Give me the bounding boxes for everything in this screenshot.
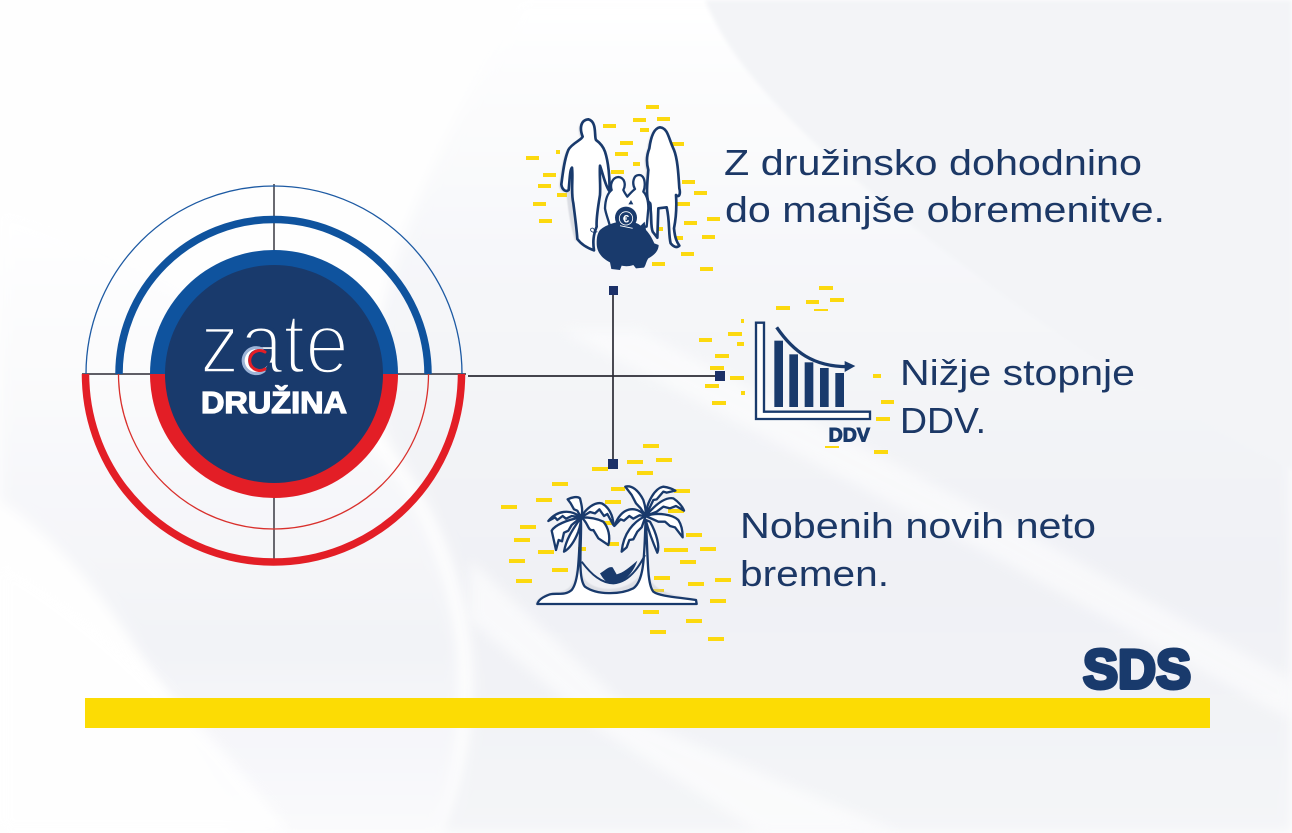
inner red half disc <box>150 374 398 498</box>
icon: falling bar chart with DDV <box>756 323 870 447</box>
DDV label: DDV <box>829 426 870 447</box>
text: family income tax <box>724 142 1165 230</box>
right palm fronds <box>614 486 684 553</box>
icon shadow <box>536 571 695 605</box>
father figure <box>561 119 609 250</box>
text: family income tax: do manjše obremenitve. <box>725 189 1165 230</box>
icon shadow <box>559 121 658 243</box>
SDS logo: SDS <box>1083 638 1191 700</box>
axes <box>756 323 870 419</box>
navy centre disc <box>165 265 383 483</box>
yellow footer bar <box>85 698 1210 728</box>
euro coin <box>615 207 637 229</box>
connector node: bottom <box>608 459 618 469</box>
text: lower VAT <box>900 352 1135 441</box>
text: no new burdens: Nobenih novih neto <box>740 505 1096 546</box>
mother figure <box>647 127 680 247</box>
text: no new burdens: bremen. <box>740 553 889 594</box>
icon: palms and hammock <box>536 486 697 605</box>
connector node: right <box>715 371 725 381</box>
yellow dashes: palms <box>501 444 731 641</box>
crosshair lines <box>82 184 466 560</box>
text: family income tax: Z družinsko dohodnino <box>724 142 1142 183</box>
falling arrow <box>777 327 855 372</box>
outer thick red arc <box>86 374 462 562</box>
inner blue half disc <box>150 250 398 374</box>
connector lines <box>468 293 716 460</box>
yellow dashes: chart <box>699 286 894 454</box>
icon: family with piggy bank <box>559 119 680 270</box>
connector node: top <box>609 286 618 295</box>
text: lower VAT: Nižje stopnje <box>900 352 1135 393</box>
child figures <box>605 175 648 227</box>
yellow dashes: family <box>526 105 720 271</box>
logo swirl in letter a <box>243 348 265 374</box>
text: lower VAT: DDV. <box>900 400 986 441</box>
thin red arc <box>118 374 428 529</box>
thick blue arc <box>119 220 428 374</box>
icon: family with piggy bank: € <box>623 213 630 225</box>
bars <box>774 341 844 407</box>
outer thin blue arc <box>86 186 462 374</box>
text: no new burdens <box>740 505 1096 594</box>
DRUŽINA label: DRUŽINA <box>201 384 347 420</box>
left palm fronds <box>548 497 613 552</box>
zate wordmark: zate <box>200 296 349 392</box>
target circle emblem <box>82 184 466 562</box>
piggy bank <box>597 221 659 270</box>
piggy tail <box>591 228 597 242</box>
hammock <box>582 555 645 584</box>
island and trunks <box>537 520 697 604</box>
